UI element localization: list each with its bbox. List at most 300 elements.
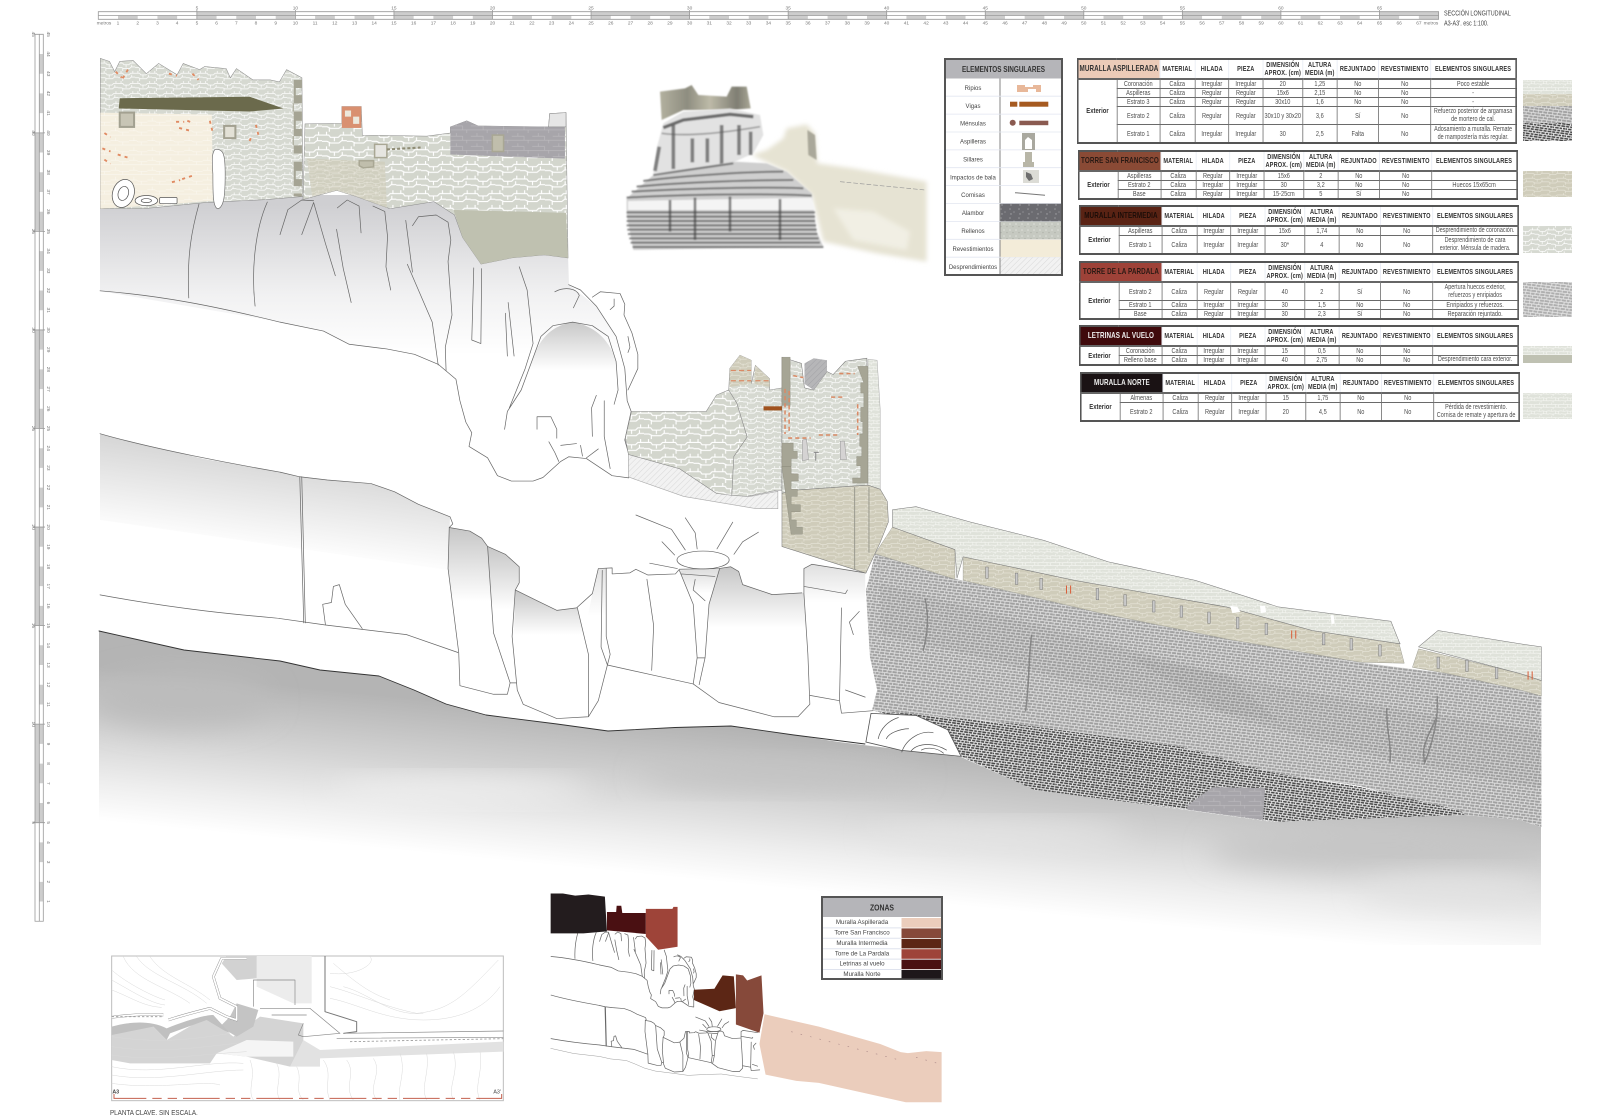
table: muralla aspillerada: No — [1401, 128, 1408, 138]
table: torre de la pardala: Caliza — [1171, 286, 1187, 296]
table: muralla intermedia: Irregular — [1203, 240, 1224, 248]
wall base light stone — [100, 58, 303, 209]
table: muralla intermedia: Exterior — [1088, 235, 1111, 244]
table: letrinas al vuelo: No — [1356, 346, 1363, 355]
vertical metric scale: 41 — [45, 110, 51, 116]
zone: Muralla Aspillerada — [759, 1014, 942, 1102]
plan contour lines — [112, 957, 500, 1100]
vertical metric scale: 20 — [45, 524, 51, 530]
horizontal metric scale: 67 — [1416, 20, 1422, 26]
coarse stone wing — [625, 390, 747, 495]
table: torre san francisco: Exterior — [1087, 180, 1110, 189]
white boulder at the wall foot — [866, 713, 961, 756]
legend swatch: rellenos — [1000, 222, 1061, 239]
vertical metric scale: 11 — [45, 702, 51, 707]
table: muralla intermedia: REVESTIMIENTO — [1383, 211, 1431, 220]
table: letrinas al vuelo: PIEZA — [1239, 331, 1256, 340]
ground fog below the rock — [90, 620, 1550, 945]
plan fortress walls — [112, 956, 503, 1042]
table: muralla aspillerada: No — [1401, 110, 1408, 120]
horizontal metric scale: 66 — [1397, 20, 1402, 26]
horizontal metric scale: 21 — [510, 20, 515, 26]
vertical metric scale: 38 — [45, 170, 51, 175]
horizontal metric scale: 20 — [490, 20, 495, 26]
small aspilleras on mini zone — [791, 1032, 942, 1064]
horizontal metric scale: 42 — [923, 20, 929, 26]
table: letrinas al vuelo: MEDIA (m) — [1307, 335, 1337, 344]
vertical metric scale: 10 — [45, 722, 51, 727]
vertical metric scale: 19 — [45, 544, 51, 550]
masonry: Torre de La Pardala — [764, 357, 888, 573]
legend: elementos singulares: Desprendimientos — [949, 265, 997, 271]
horizontal metric scale: 56 — [1199, 20, 1205, 26]
vertical metric scale: 13 — [45, 662, 51, 668]
masonry swatch: torre san francisco — [1523, 171, 1572, 197]
vertical metric scale: 9 — [45, 743, 51, 746]
table: torre de la pardala: TORRE DE LA PARDALA — [1083, 267, 1159, 276]
table: torre san francisco: PIEZA — [1238, 156, 1255, 165]
horizontal metric scale: 53 — [1140, 20, 1146, 26]
zones mini-diagram — [551, 894, 942, 1102]
table: muralla norte: Caliza — [1172, 393, 1188, 402]
table: muralla aspillerada: Falta — [1352, 128, 1364, 138]
plan shaded terrain — [112, 956, 503, 1067]
horizontal metric scale: 3 — [156, 20, 159, 26]
masonry: Torre San Francisco upper wall — [303, 106, 568, 264]
horizontal metric scale: 31 — [707, 20, 712, 26]
tower lower beige part — [782, 485, 888, 573]
table: muralla intermedia — [1079, 205, 1519, 255]
table: muralla aspillerada: MATERIAL — [1162, 64, 1192, 73]
table: torre san francisco: MATERIAL — [1163, 156, 1193, 165]
horizontal metric scale: 5 — [196, 6, 199, 12]
table: muralla intermedia: exterior. Ménsula de madera. — [1440, 244, 1510, 252]
table: torre san francisco: APROX. (cm) — [1265, 160, 1302, 169]
horizontal metric scale: 55 — [1180, 6, 1185, 12]
lower stratified rock block — [627, 162, 823, 250]
masonry: Muralla Intermedia — [625, 355, 782, 509]
vertical metric scale: 18 — [45, 564, 51, 569]
dark lower stone band — [872, 710, 1465, 822]
orange ripios in the tower — [785, 374, 858, 438]
table: muralla norte: HILADA — [1204, 378, 1226, 387]
horizontal metric scale: 25 — [588, 20, 594, 26]
table: muralla intermedia: No — [1356, 240, 1363, 248]
table: letrinas al vuelo: Desprendimiento cara exterior. — [1438, 356, 1512, 363]
table: muralla norte: No — [1404, 406, 1411, 416]
table: torre de la pardala: ALTURA — [1310, 263, 1334, 272]
vertical metric scale: 30 — [30, 327, 36, 333]
horizontal metric scale: 50 — [1081, 6, 1087, 12]
cream wall sketch — [752, 124, 927, 262]
wooden beam — [764, 406, 782, 410]
table: muralla norte: No — [1357, 393, 1364, 402]
table: muralla norte: Irregular — [1238, 393, 1259, 402]
table: muralla norte: No — [1357, 406, 1364, 416]
vertical metric scale: 36 — [45, 209, 51, 215]
legend: elementos singulares: Vigas — [966, 104, 980, 110]
horizontal metric scale: 46 — [1002, 20, 1008, 26]
horizontal metric scale: 23 — [549, 20, 555, 26]
horizontal metric scale: 17 — [431, 20, 436, 26]
legend: elementos singulares: Sillares — [963, 158, 983, 164]
table: letrinas al vuelo: DIMENSIÓN — [1268, 327, 1301, 336]
horizontal metric scale: 6 — [215, 20, 218, 26]
table: muralla aspillerada: 20 — [1280, 79, 1286, 88]
rock contours west part — [100, 202, 280, 618]
table: muralla norte: ALTURA — [1311, 374, 1335, 383]
table: torre san francisco: No — [1402, 171, 1409, 180]
table: muralla intermedia: Irregular — [1237, 240, 1258, 248]
table: torre san francisco: TORRE SAN FRANCISCO — [1081, 156, 1159, 165]
table: muralla aspillerada: Estrato 1 — [1127, 128, 1149, 138]
table: muralla intermedia: MEDIA (m) — [1307, 215, 1337, 224]
legend: zonas: Muralla Intermedia — [836, 940, 888, 947]
horizontal metric scale: 11 — [313, 20, 318, 26]
table: muralla aspillerada: REVESTIMIENTO — [1381, 64, 1429, 73]
table: muralla aspillerada: No — [1354, 79, 1361, 88]
table: muralla norte: 4,5 — [1319, 406, 1327, 416]
legend: elementos singulares: Alambor — [962, 211, 984, 217]
table: muralla norte: REVESTIMIENTO — [1384, 378, 1432, 387]
vertical metric scale: 42 — [45, 91, 51, 96]
table: muralla aspillerada: Sí — [1355, 110, 1360, 120]
vertical metric scale: 10 — [30, 722, 36, 727]
masonry swatch: torre de la pardala — [1523, 282, 1572, 317]
mini rock outlines — [551, 932, 760, 1079]
vertical metric scale: 4 — [45, 841, 51, 844]
horizontal metric scale: 2 — [136, 20, 139, 26]
horizontal metric scale: 41 — [904, 20, 909, 26]
table: torre san francisco: REJUNTADO — [1341, 156, 1377, 165]
horizontal metric scale: 55 — [1180, 20, 1185, 26]
red repair marks — [1066, 585, 1532, 680]
grey hatched void — [804, 358, 827, 390]
horizontal metric scale: 7 — [235, 20, 238, 26]
table: muralla intermedia: Desprendimiento de cara — [1445, 236, 1506, 244]
table: muralla intermedia: Aspilleras — [1128, 226, 1152, 235]
legend: elementos singulares — [945, 59, 1062, 275]
table: muralla aspillerada: Adosamiento a muralla. Remate — [1434, 126, 1512, 132]
vertical metric scale: 45 — [30, 32, 36, 37]
purple-grey crown block — [450, 121, 565, 159]
horizontal metric scale: 59 — [1259, 20, 1264, 26]
table: muralla aspillerada: APROX. (cm) — [1264, 68, 1301, 77]
table: letrinas al vuelo: Coronación — [1126, 346, 1155, 355]
horizontal metric scale: 61 — [1298, 20, 1304, 26]
legend: elementos singulares: Aspilleras — [960, 140, 986, 146]
legend: elementos singulares: ELEMENTOS SINGULARES — [962, 65, 1045, 74]
table: torre de la pardala — [1079, 261, 1519, 320]
horizontal metric scale: 40 — [884, 20, 890, 26]
horizontal metric scale: 33 — [746, 20, 752, 26]
table: muralla aspillerada: de mortero de cal. — [1451, 116, 1495, 122]
vertical metric scale: 39 — [45, 150, 51, 156]
horizontal metric scale: 60 — [1278, 20, 1284, 26]
masonry swatch: muralla intermedia — [1523, 226, 1572, 253]
vertical metric scale: 37 — [45, 189, 51, 195]
rock contours central part — [280, 200, 873, 719]
table: muralla aspillerada: 3,6 — [1316, 110, 1324, 120]
vertical metric scale: 25 — [30, 426, 36, 431]
table: letrinas al vuelo: Irregular — [1237, 346, 1258, 355]
table: muralla norte: MATERIAL — [1165, 378, 1195, 387]
vertical metric scale: 8 — [45, 762, 51, 765]
table: letrinas al vuelo: REVESTIMIENTO — [1383, 331, 1431, 340]
table: torre de la pardala: MEDIA (m) — [1307, 271, 1337, 280]
horizontal metric scale: 12 — [332, 20, 338, 26]
table: torre san francisco: 15x6 — [1278, 171, 1290, 180]
table: muralla norte: Caliza — [1172, 406, 1188, 416]
table: muralla aspillerada: Caliza — [1169, 110, 1185, 120]
table: muralla norte: 20 — [1283, 406, 1289, 416]
table: muralla norte: Cornisa de remate y apertura de — [1437, 412, 1515, 418]
table: torre san francisco: ALTURA — [1309, 152, 1333, 161]
horizontal metric scale: 29 — [667, 20, 673, 26]
legend: zonas: Letrinas al vuelo — [839, 961, 885, 968]
plan view: A3 — [112, 1089, 119, 1095]
table: muralla intermedia: REJUNTADO — [1342, 211, 1378, 220]
horizontal metric scale: 26 — [608, 20, 614, 26]
horizontal metric scale: 14 — [372, 20, 377, 26]
table: torre de la pardala: APROX. (cm) — [1266, 271, 1303, 280]
section title — [1444, 7, 1511, 28]
table: muralla norte: 15 — [1283, 393, 1289, 402]
beige aspillerada band — [875, 527, 1541, 696]
horizontal metric scale: 35 — [786, 20, 791, 26]
zone: Torre de La Pardala — [646, 907, 678, 950]
table: letrinas al vuelo: 15 — [1282, 346, 1288, 355]
horizontal metric scale: 45 — [983, 20, 988, 26]
tower quoins — [782, 357, 868, 534]
main longitudinal section drawing — [100, 58, 1541, 827]
vertical metric scale: 20 — [30, 524, 36, 530]
horizontal metric scale: 58 — [1239, 20, 1244, 26]
vertical metric scale: 15 — [45, 623, 51, 629]
legend: zonas: Muralla Norte — [843, 971, 881, 978]
legend swatch: alambor — [1000, 204, 1061, 221]
horizontal metric scale: 10 — [293, 20, 298, 26]
horizontal metric scale: 15 — [391, 20, 397, 26]
vertical scars on the wall — [923, 599, 1437, 763]
plan caption: PLANTA CLAVE. SIN ESCALA. — [110, 1110, 198, 1117]
table: muralla aspillerada: ALTURA — [1308, 60, 1332, 69]
table: letrinas al vuelo: APROX. (cm) — [1266, 335, 1303, 344]
masonry: Muralla Aspillerada upper wall — [100, 58, 303, 210]
vertical metric scale: 45 — [45, 32, 51, 37]
table: muralla norte: No — [1404, 393, 1411, 402]
vertical metric scale: 28 — [45, 367, 51, 372]
legend: elementos singulares: Ménsulas — [960, 122, 986, 128]
horizontal metric scale: 62 — [1318, 20, 1323, 26]
vertical metric scale: 34 — [45, 248, 51, 254]
table: muralla norte: Estrato 2 — [1130, 406, 1152, 416]
horizontal metric scale: 18 — [450, 20, 456, 26]
table: muralla norte — [1080, 372, 1520, 422]
section title: SECCIÓN LONGITUDINAL — [1444, 7, 1511, 18]
erosion ovals — [109, 176, 177, 210]
vertical metric scale: 25 — [45, 426, 51, 431]
corner quoins — [293, 80, 302, 197]
horizontal metric scale: 16 — [411, 20, 417, 26]
vertical metric scale: 43 — [45, 71, 51, 77]
table: muralla aspillerada: 30 — [1280, 128, 1286, 138]
table: torre de la pardala: PIEZA — [1239, 267, 1256, 276]
table: muralla intermedia: No — [1403, 240, 1410, 248]
table: muralla aspillerada: HILADA — [1201, 64, 1223, 73]
horizontal metric scale: 1 — [117, 20, 120, 26]
table: torre san francisco: ELEMENTOS SINGULARES — [1436, 156, 1512, 165]
zone: Torre San Francisco — [736, 974, 764, 1033]
table: muralla norte: Almenas — [1130, 393, 1152, 402]
horizontal metric scale: metros — [97, 20, 112, 26]
table: letrinas al vuelo: Exterior — [1088, 350, 1111, 360]
table: muralla aspillerada: Exterior — [1086, 106, 1109, 115]
table: torre san francisco: REVESTIMIENTO — [1382, 156, 1430, 165]
table: torre de la pardala: REVESTIMIENTO — [1383, 267, 1431, 276]
zone: Muralla Norte in the upper crown — [551, 894, 607, 933]
table: muralla intermedia: Caliza — [1171, 240, 1187, 248]
finer stone core — [729, 355, 782, 496]
horizontal metric scale: 4 — [176, 20, 179, 26]
pencil sketch of the castle volume — [627, 85, 927, 262]
legend swatch: revestimientos — [1000, 240, 1061, 257]
table: muralla intermedia: Desprendimiento de coronación. — [1436, 227, 1514, 234]
table: muralla norte: MURALLA NORTE — [1094, 378, 1150, 387]
vertical metric scale: 26 — [45, 406, 51, 412]
masonry swatch: muralla norte — [1523, 393, 1572, 419]
table: torre san francisco: No — [1355, 171, 1362, 180]
vertical metric scale: 30 — [45, 327, 51, 333]
table: torre san francisco: HILADA — [1202, 156, 1224, 165]
table: muralla intermedia: HILADA — [1203, 211, 1225, 220]
table: muralla norte: Exterior — [1089, 402, 1112, 411]
legend: elementos singulares: Cornisas — [961, 193, 985, 199]
horizontal metric scale: 9 — [274, 20, 277, 26]
table: torre de la pardala: Apertura huecos exterior, — [1445, 284, 1506, 290]
horizontal metric scale: 30 — [687, 20, 693, 26]
detachment hatch area — [628, 454, 778, 509]
table: muralla intermedia: No — [1403, 226, 1410, 235]
legend swatch: cornisas — [1015, 193, 1045, 195]
orange ripios marks — [102, 70, 259, 182]
horizontal metric scale: 38 — [845, 20, 850, 26]
horizontal metric scale: 60 — [1278, 6, 1284, 12]
table: letrinas al vuelo: ELEMENTOS SINGULARES — [1437, 331, 1513, 340]
horizontal metric scale: 15 — [391, 6, 397, 12]
table: muralla aspillerada: Irregular — [1235, 79, 1256, 88]
horizontal metric scale: 13 — [352, 20, 357, 26]
table: muralla intermedia: MURALLA INTERMEDIA — [1084, 211, 1158, 220]
plan view: A3' — [493, 1089, 501, 1095]
horizontal metric scale: 64 — [1357, 20, 1363, 26]
vertical metric scale: 27 — [45, 386, 51, 392]
table: torre de la pardala: Sí — [1357, 286, 1362, 296]
vertical metric scale: 32 — [45, 288, 51, 293]
table: muralla intermedia: ELEMENTOS SINGULARES — [1437, 211, 1513, 220]
horizontal metric scale: 19 — [470, 20, 476, 26]
horizontal metric scale: 36 — [805, 20, 811, 26]
table: letrinas al vuelo: 0,5 — [1318, 346, 1326, 355]
crenel beige tops — [730, 355, 770, 387]
vertical metric scale: 12 — [45, 682, 51, 688]
horizontal metric scale: 34 — [766, 20, 771, 26]
plan section line A3-A3' — [114, 1094, 502, 1098]
table: muralla norte: Pérdida de revestimiento. — [1445, 404, 1507, 410]
darker wash bands on the wall — [880, 583, 1279, 722]
horizontal metric scale: 32 — [726, 20, 732, 26]
section title: A3-A3'. esc 1:100. — [1444, 20, 1489, 28]
legend swatch: desprendimientos — [1000, 257, 1061, 274]
table: muralla norte: Regular — [1205, 393, 1225, 402]
crest rubble stone — [892, 507, 1541, 681]
light upper corner — [549, 113, 566, 127]
table: torre san francisco: Caliza — [1170, 171, 1186, 180]
openings in the tower — [802, 439, 846, 461]
legend swatch: vigas — [1010, 102, 1048, 107]
table: muralla intermedia: ALTURA — [1310, 207, 1334, 216]
table: muralla intermedia: MATERIAL — [1164, 211, 1194, 220]
horizontal metric scale — [97, 6, 1439, 26]
table: torre de la pardala: MATERIAL — [1164, 267, 1194, 276]
horizontal metric scale: 37 — [825, 20, 831, 26]
table: muralla aspillerada — [1077, 58, 1517, 144]
windows — [359, 135, 504, 168]
plan view — [112, 956, 503, 1101]
castle top in beige — [660, 85, 751, 120]
vertical metric scale: 5 — [30, 821, 36, 824]
vertical metric scale: 14 — [45, 643, 51, 648]
horizontal metric scale: 47 — [1022, 20, 1028, 26]
table: muralla norte: APROX. (cm) — [1267, 382, 1304, 391]
horizontal metric scale: 48 — [1042, 20, 1047, 26]
table: torre de la pardala: ELEMENTOS SINGULARES — [1437, 267, 1513, 276]
table: letrinas al vuelo: MATERIAL — [1164, 331, 1194, 340]
table: muralla aspillerada: ELEMENTOS SINGULARES — [1435, 64, 1511, 73]
horizontal metric scale: 10 — [293, 6, 298, 12]
vertical metric scale: 7 — [45, 782, 51, 785]
white middle rock block — [653, 108, 763, 173]
legend: elementos singulares: Ripios — [965, 86, 981, 92]
table: letrinas al vuelo: Caliza — [1171, 346, 1187, 355]
legend: zonas — [822, 897, 942, 979]
light vertical crack strip — [212, 149, 225, 209]
horizontal metric scale: 24 — [569, 20, 574, 26]
rock shading — [100, 195, 865, 654]
table: muralla norte: MEDIA (m) — [1308, 382, 1338, 391]
horizontal metric scale: 43 — [943, 20, 949, 26]
table: torre de la pardala: Regular — [1238, 286, 1258, 296]
vertical metric scale: 40 — [45, 130, 51, 136]
vertical metric scale: 22 — [45, 485, 51, 491]
horizontal metric scale: 20 — [490, 6, 495, 12]
table: muralla intermedia: Estrato 1 — [1129, 240, 1151, 248]
masonry swatch: letrinas al vuelo — [1523, 346, 1572, 363]
horizontal metric scale: 27 — [628, 20, 633, 26]
table: muralla aspillerada: Irregular — [1201, 128, 1222, 138]
horizontal metric scale: 39 — [864, 20, 870, 26]
table: muralla norte: DIMENSIÓN — [1269, 374, 1302, 383]
beige lower stone area — [307, 159, 387, 208]
horizontal metric scale: 28 — [648, 20, 653, 26]
vertical metric scale: 29 — [45, 347, 51, 353]
horizontal metric scale: 30 — [687, 6, 693, 12]
legend: zonas: ZONAS — [870, 904, 894, 912]
legend: elementos singulares: Revestimientos — [952, 247, 994, 253]
legend swatch: sillares — [1023, 152, 1034, 167]
table: torre de la pardala: refuerzos y enripiados — [1448, 292, 1502, 298]
vertical metric scale: 31 — [45, 308, 51, 313]
